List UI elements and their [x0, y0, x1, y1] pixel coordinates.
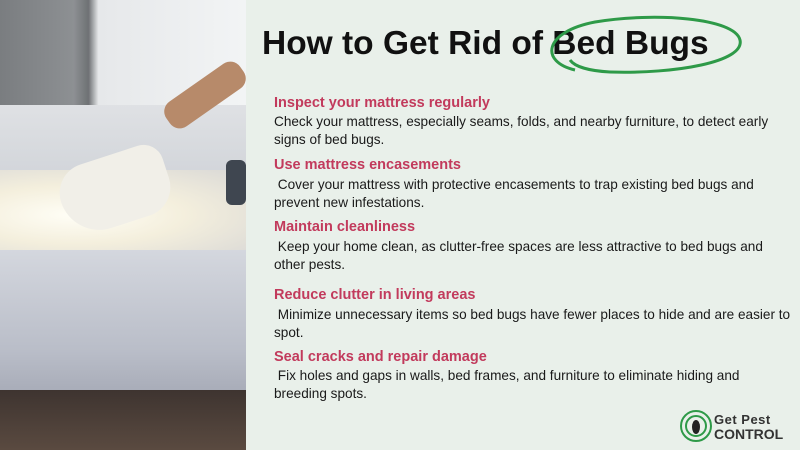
logo	[680, 410, 783, 442]
tip 1: Inspect your mattress regularly	[274, 95, 490, 111]
text: signs of bed bugs.	[274, 132, 384, 147]
text: other pests.	[274, 257, 345, 272]
text: breeding spots.	[274, 386, 367, 401]
text: Check your mattress, especially seams, folds, and nearby furniture, to detect early	[274, 114, 768, 129]
tip 4: Reduce clutter in living areas	[274, 287, 475, 303]
text: spot.	[274, 325, 303, 340]
tip 3: Maintain cleanliness	[274, 219, 415, 235]
text: Minimize unnecessary items so bed bugs have fewer places to hide and are easier to	[278, 307, 790, 322]
photo: gloved hand lifting mattress	[0, 0, 246, 450]
highlight ellipse around "Bed Bugs"	[550, 16, 742, 74]
text: prevent new infestations.	[274, 195, 424, 210]
tip 5: Seal cracks and repair damage	[274, 349, 487, 365]
text: Fix holes and gaps in walls, bed frames, and furniture to eliminate hiding and	[278, 368, 739, 383]
title: How to Get Rid of Bed Bugs	[262, 25, 709, 62]
text: Cover your mattress with protective encasements to trap existing bed bugs and	[278, 177, 754, 192]
tip 2: Use mattress encasements	[274, 157, 461, 173]
logo: Get Pest	[714, 412, 771, 427]
logo: CONTROL	[714, 426, 783, 442]
text: Keep your home clean, as clutter-free spaces are less attractive to bed bugs and	[278, 239, 763, 254]
